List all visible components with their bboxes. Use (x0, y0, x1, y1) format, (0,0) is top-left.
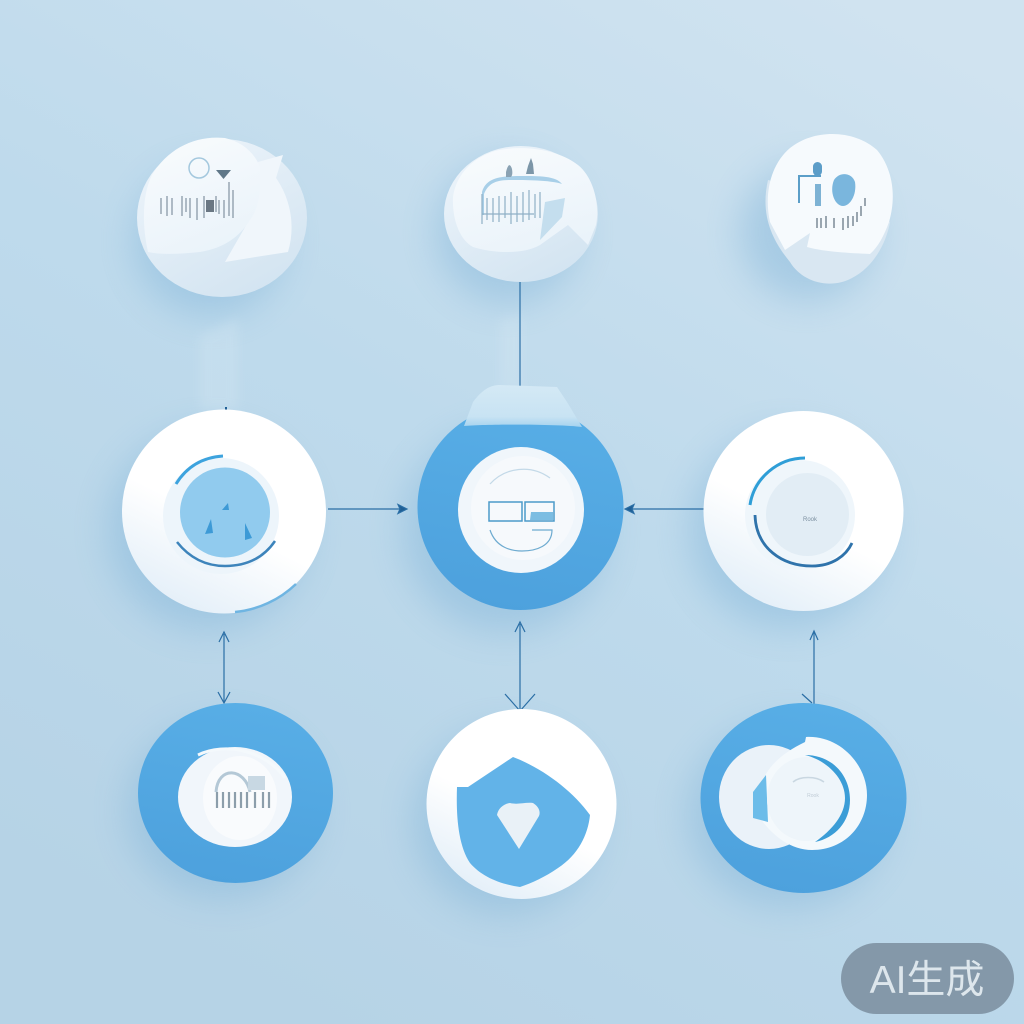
icon: shield (457, 757, 590, 887)
connector: top to center (519, 282, 521, 392)
badge: AI generated (841, 943, 1014, 1014)
arrow: left node to center (328, 504, 407, 514)
node: top center bubble (444, 146, 598, 282)
arrow: center vertical double (505, 622, 535, 711)
node: top left bubble (137, 138, 307, 297)
node: middle right white circle (704, 411, 904, 611)
arrow: left vertical double (218, 632, 230, 703)
node: center blue circle (418, 385, 624, 610)
icon: arch and bars (216, 773, 269, 808)
node: bottom left blue circle (138, 703, 333, 883)
node: bottom right blue circle (700, 703, 906, 893)
label: small caption: Rook (803, 517, 818, 523)
pseudo text icon (161, 158, 233, 220)
icon: two screens (489, 502, 554, 521)
node: middle left white circle (122, 410, 326, 614)
node: bottom center white circle with shield (426, 709, 616, 899)
arrow: right node to center (625, 504, 705, 514)
faint light patches (200, 314, 522, 410)
arrow: right vertical (802, 631, 818, 704)
arrow stub: top of left node (225, 407, 227, 411)
node: top right bubble (765, 134, 893, 284)
badge: AI generated: AI生成 (870, 959, 984, 1002)
soft drop shadows (108, 160, 888, 914)
icon: triangle marks (205, 503, 252, 540)
label: small caption: Rook (807, 793, 819, 799)
icon: heart drop (497, 803, 540, 849)
